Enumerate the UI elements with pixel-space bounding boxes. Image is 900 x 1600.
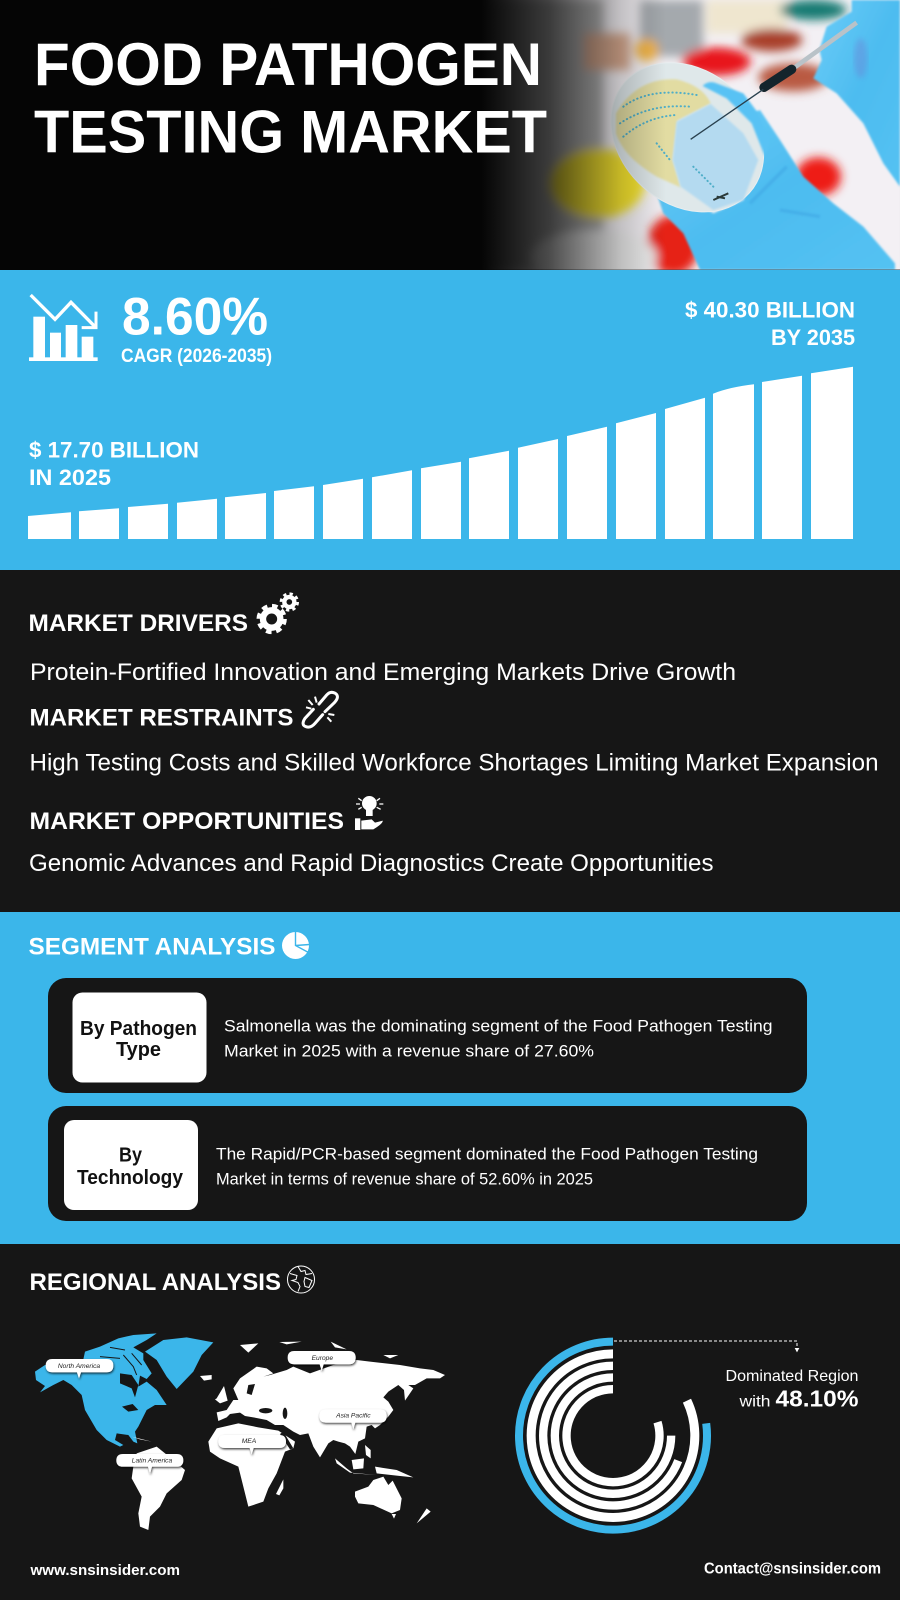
- 2035 value: [685, 298, 855, 350]
- callout: Latin America: [116, 1454, 183, 1474]
- dominated region text: 48.10%: [776, 1386, 859, 1412]
- panel: market size and CAGR: [0, 270, 900, 570]
- dominated region text: Dominated Region: [726, 1368, 858, 1385]
- hero photo: gloved hands with petri dish: [490, 0, 900, 270]
- card: by technology: [48, 1106, 807, 1221]
- bar chart: market growth: [28, 367, 853, 539]
- description: pathogen type: [224, 1016, 772, 1060]
- callout: North America: North America: [58, 1363, 100, 1370]
- icon: pie chart: [282, 932, 310, 959]
- callout: North America: [46, 1359, 113, 1379]
- label box: by pathogen type: Type: [116, 1039, 161, 1061]
- panel: market dynamics: [0, 570, 900, 912]
- panel: header: [0, 0, 900, 283]
- 2025 value: $ 17.70 BILLION: [29, 438, 199, 462]
- label box: by technology: By: [119, 1144, 143, 1166]
- CAGR value: 8.60%: [122, 288, 268, 346]
- description: pathogen type: Salmonella was the dominating segment of the Food Pathogen Testing: [224, 1016, 772, 1036]
- heading: market drivers: MARKET DRIVERS: [28, 610, 248, 637]
- label box: by technology: Technology: [77, 1167, 184, 1189]
- 2025 value: [29, 438, 199, 490]
- description: technology: The Rapid/PCR-based segment dominated the Food Pathogen Testing: [216, 1144, 758, 1164]
- radial bar chart: [519, 1342, 707, 1530]
- icon: chart with trend arrow: [29, 295, 98, 361]
- CAGR label: CAGR (2026-2035): [121, 346, 272, 367]
- world map: [35, 1333, 445, 1530]
- 2035 value: $ 40.30 BILLION: [685, 298, 855, 322]
- label box: by technology: [64, 1120, 198, 1210]
- callout: Latin America: Latin America: [132, 1458, 173, 1465]
- label box: by pathogen type: By Pathogen: [80, 1018, 197, 1040]
- gloved hand lower: [657, 110, 895, 270]
- rest of the world: [132, 1342, 445, 1530]
- label box: by pathogen type: [72, 992, 206, 1082]
- panel: regional analysis: [0, 1244, 900, 1600]
- callout: Europe: [288, 1351, 356, 1371]
- restraint text: High Testing Costs and Skilled Workforce Shortages Limiting Market Expansion: [30, 750, 878, 776]
- description: pathogen type: Market in 2025 with a revenue share of 27.60%: [224, 1042, 594, 1060]
- callout: MEA: MEA: [242, 1438, 257, 1445]
- callout: Asia Pacific: Asia Pacific: [335, 1413, 371, 1420]
- dashed leader arrow: [614, 1341, 799, 1352]
- gloved hand upper right: [813, 0, 900, 187]
- gloved fingers: [703, 82, 770, 157]
- footer website: www.snsinsider.com: [29, 1562, 180, 1579]
- heading: market restraints: MARKET RESTRAINTS: [30, 704, 294, 732]
- dominated region text: [726, 1368, 859, 1412]
- North America region highlighted: [35, 1333, 213, 1447]
- icon: broken link: [303, 692, 337, 727]
- footer contact: Contact@snsinsider.com: [704, 1560, 881, 1578]
- callout: Asia Pacific: [319, 1409, 387, 1429]
- driver text: Protein-Fortified Innovation and Emerging Markets Drive Growth: [30, 659, 736, 686]
- heading: market opportunities: MARKET OPPORTUNITIES: [30, 808, 344, 835]
- heading: segment analysis: SEGMENT ANALYSIS: [28, 934, 276, 960]
- callout: Europe: Europe: [312, 1355, 333, 1362]
- title: FOOD PATHOGEN: [34, 31, 542, 98]
- dominated region text: with: [738, 1394, 770, 1410]
- card: by pathogen type: [48, 978, 807, 1093]
- description: technology: Market in terms of revenue share of 52.60% in 2025: [216, 1170, 593, 1188]
- 2025 value: IN 2025: [29, 465, 111, 490]
- callout: MEA: [218, 1435, 286, 1455]
- icon: lightbulb on hand: [355, 796, 383, 830]
- swab: [691, 23, 857, 139]
- 2035 value: BY 2035: [771, 325, 855, 350]
- icon: gears: [258, 594, 298, 632]
- title: [34, 31, 547, 166]
- panel: segment analysis: [0, 912, 900, 1244]
- heading: regional analysis: REGIONAL ANALYSIS: [30, 1269, 281, 1296]
- opportunity text: Genomic Advances and Rapid Diagnostics Create Opportunities: [29, 850, 714, 877]
- title: TESTING MARKET: [34, 98, 547, 166]
- icon: globe: [288, 1266, 314, 1293]
- description: technology: [216, 1144, 758, 1188]
- inland water: [247, 1384, 293, 1449]
- petri dish: [612, 62, 764, 212]
